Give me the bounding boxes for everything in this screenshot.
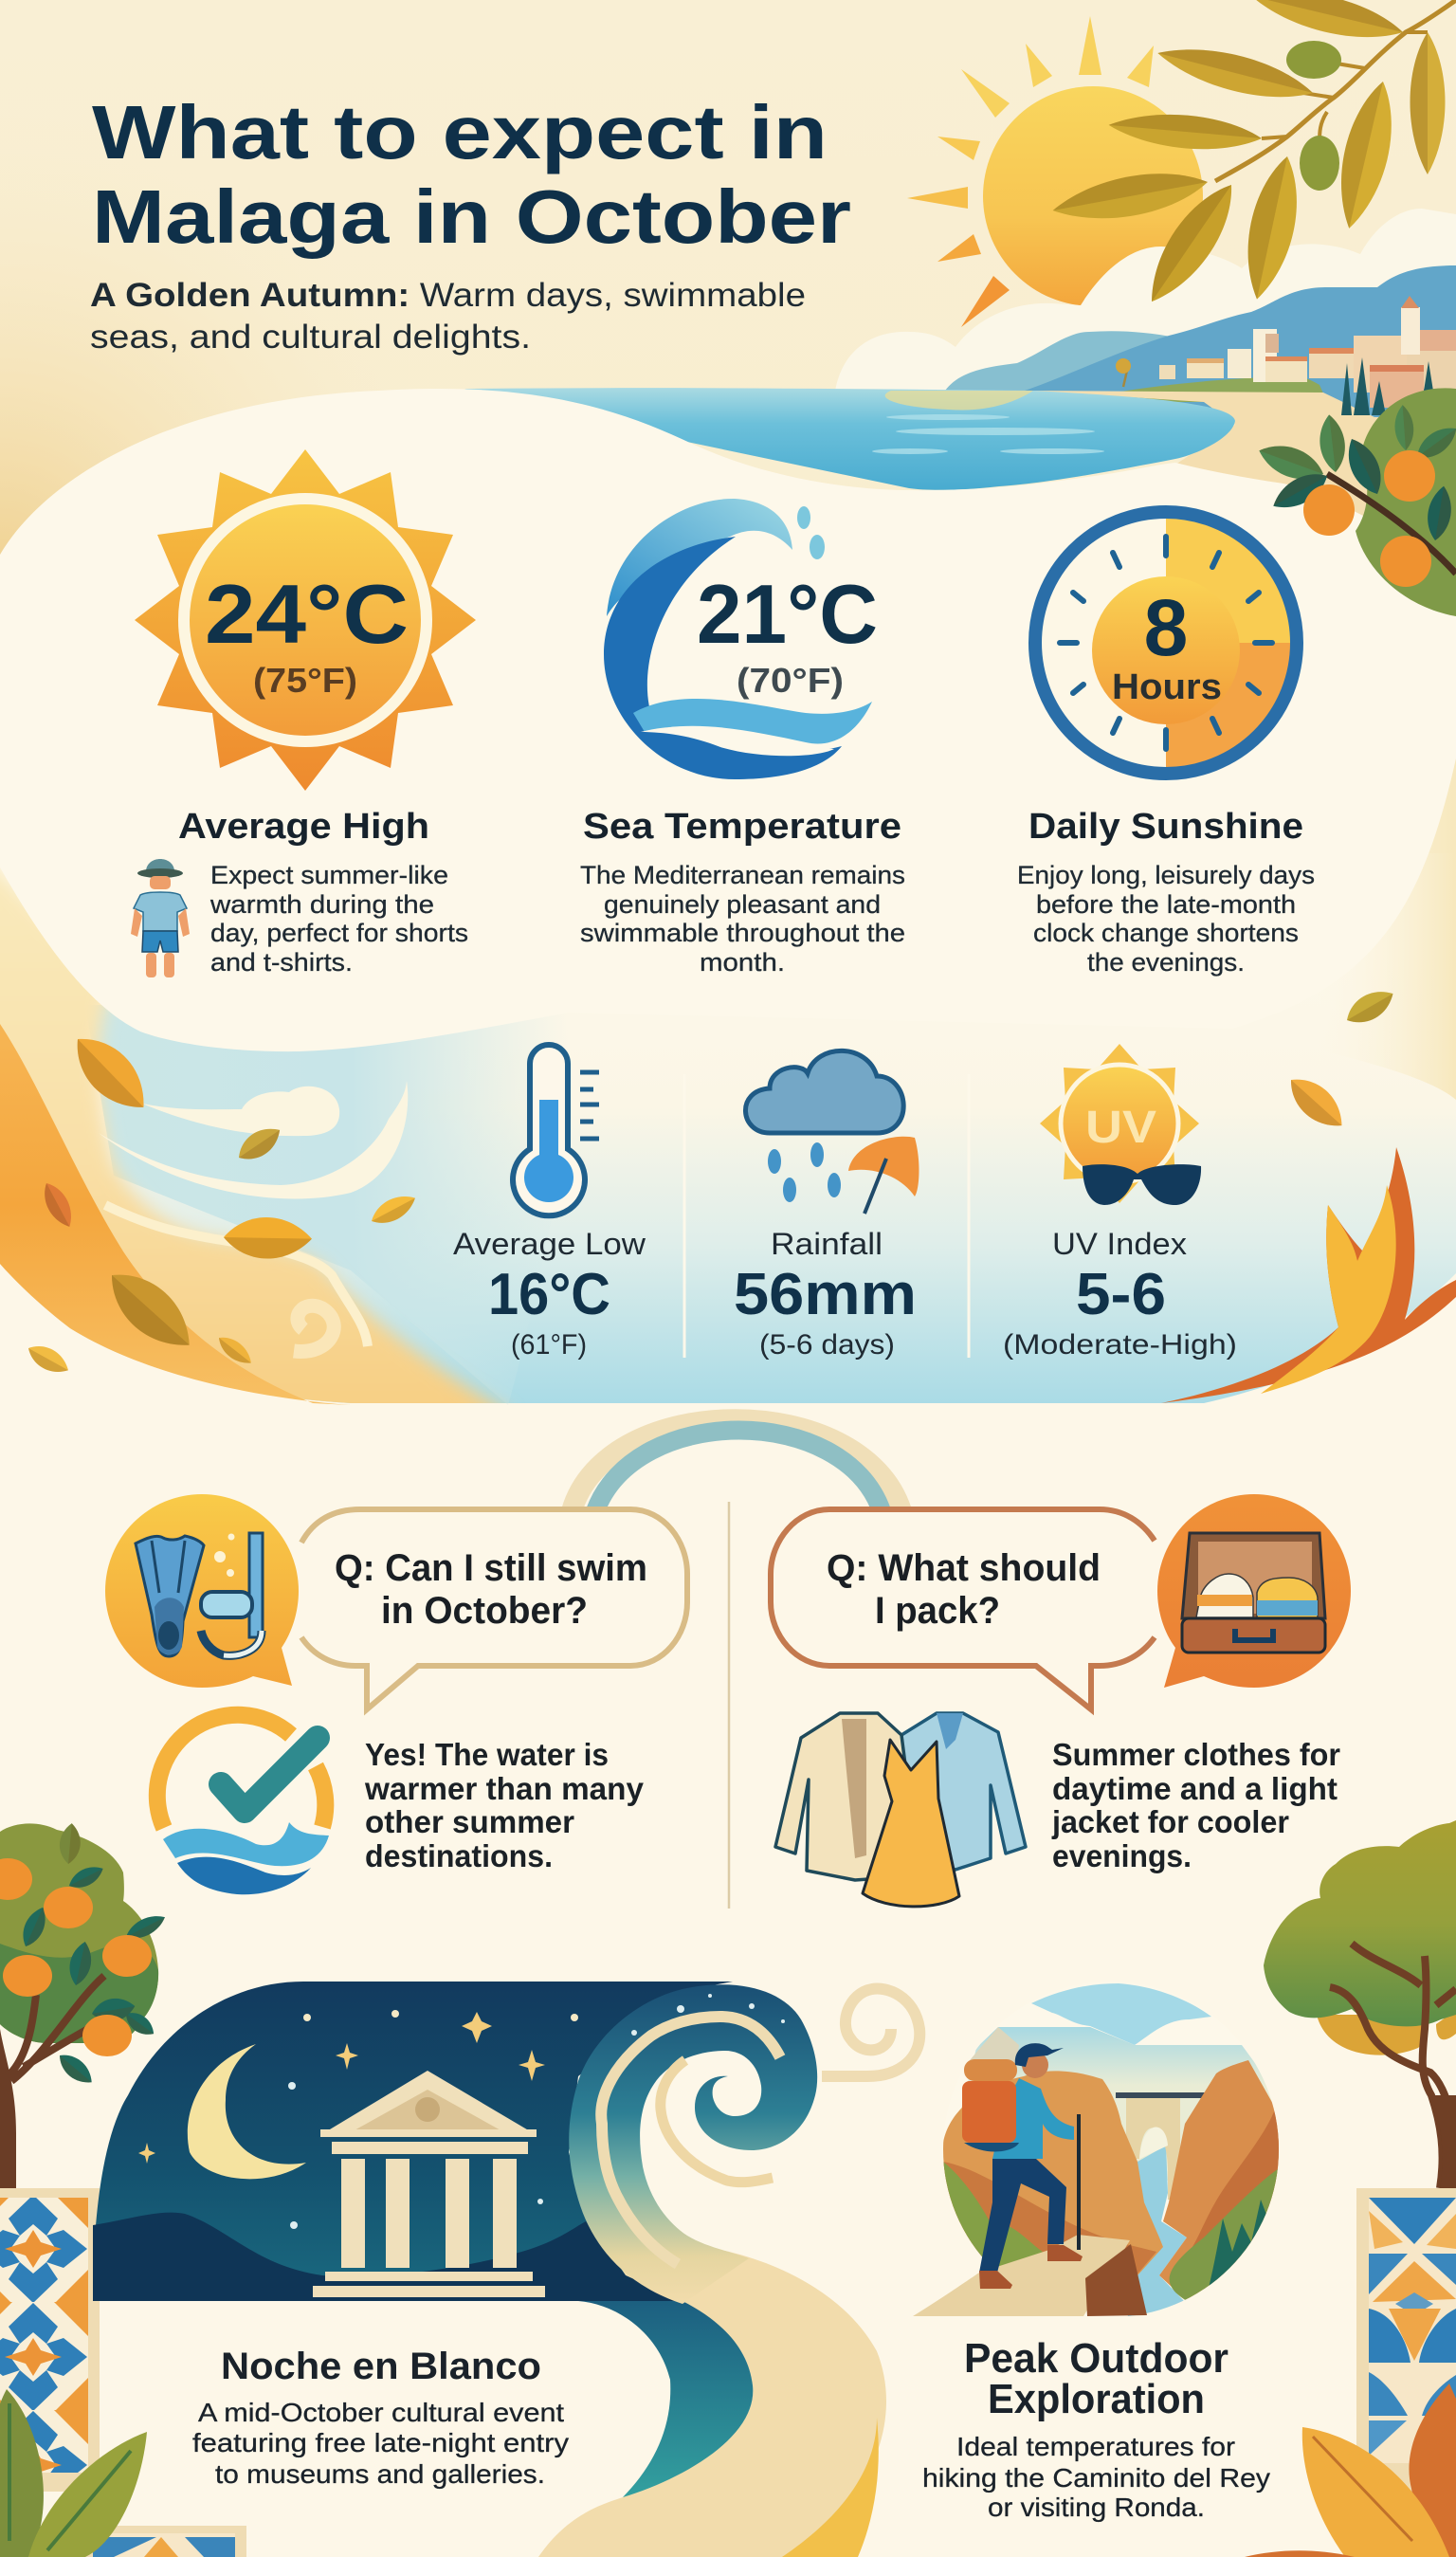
text: swim answer bbox=[364, 1737, 645, 1873]
text: average low value: Average Low bbox=[453, 1227, 646, 1261]
text: packing answer: daytime and a light bbox=[1052, 1771, 1338, 1806]
decoration: falling leaves bbox=[24, 983, 1399, 1379]
spiral highlight bbox=[601, 2017, 780, 2264]
panel: noche en blanco night scene bbox=[93, 1982, 817, 2497]
panel: swim question bbox=[105, 1494, 687, 1894]
icon: fins and snorkel bbox=[105, 1494, 299, 1688]
heading: daily sunshine: Daily Sunshine bbox=[1028, 807, 1303, 847]
heading: average high: Average High bbox=[178, 807, 429, 847]
icon: sun with temperature: (75°F) bbox=[253, 661, 357, 700]
text: daily sunshine description: before the late-month bbox=[1036, 890, 1296, 919]
spiral wave bbox=[569, 1984, 817, 2304]
text: sea temperature description bbox=[580, 861, 905, 977]
callout: packing question bubble bbox=[771, 1509, 1155, 1709]
spiral inner swirl bbox=[661, 2060, 773, 2183]
illustration: orange tree branch bbox=[1254, 388, 1456, 616]
lower teal wave bbox=[578, 2301, 753, 2497]
text: sea temperature description: genuinely pleasant and bbox=[604, 890, 881, 919]
decoration: beige swirl bbox=[822, 1988, 919, 2076]
hiking scene circle bbox=[943, 1982, 1279, 2317]
text: average high description: Expect summer-like bbox=[210, 861, 448, 889]
illustration: olive branch bbox=[1049, 0, 1456, 313]
illustration: autumn flame leaves bbox=[1161, 1147, 1456, 1403]
text: peak outdoor exploration: hiking the Caminito del Rey bbox=[922, 2463, 1270, 2493]
illustration: left azulejo tiles bbox=[0, 2188, 100, 2520]
subtitle: seas, and cultural delights. bbox=[90, 319, 531, 356]
text: sea temperature description: month. bbox=[700, 948, 785, 977]
text: packing answer: jacket for cooler bbox=[1051, 1804, 1289, 1839]
icon: rain cloud with umbrella bbox=[745, 1050, 919, 1214]
text: rainfall value bbox=[734, 1227, 917, 1361]
text: packing answer: Summer clothes for bbox=[1052, 1737, 1340, 1772]
text: average low value: (61°F) bbox=[511, 1329, 587, 1361]
illustration: coastal town bbox=[1115, 296, 1456, 408]
illustration: bottom right autumn leaves bbox=[1245, 2383, 1456, 2557]
callout: packing question bubble: I pack? bbox=[875, 1590, 1000, 1632]
icon: sun with sunglasses: UV bbox=[1085, 1103, 1156, 1153]
illustration: bottom tile bbox=[79, 2526, 246, 2557]
stat: average low bbox=[453, 1045, 646, 1361]
callout: swim question bubble: in October? bbox=[381, 1590, 588, 1632]
heading: sea temperature: Sea Temperature bbox=[583, 807, 901, 847]
callout: swim question bubble bbox=[301, 1509, 687, 1709]
illustration: bottom left leaves bbox=[0, 2389, 147, 2557]
icon: clock with eight hours: 8 bbox=[1144, 583, 1188, 672]
icon: clock with eight hours bbox=[1035, 512, 1297, 774]
decoration: arch bbox=[572, 1419, 901, 1511]
text: peak outdoor exploration: Peak Outdoor bbox=[964, 2335, 1228, 2382]
illustration: beach bbox=[1028, 391, 1456, 607]
text: uv index value: UV Index bbox=[1052, 1227, 1187, 1261]
stat: rainfall bbox=[734, 1050, 919, 1361]
icon: person in summer clothes bbox=[131, 859, 190, 977]
text: noche en blanco: to museums and galleries. bbox=[215, 2459, 545, 2489]
title: Malaga in October bbox=[92, 174, 851, 259]
illustration: sea bbox=[464, 388, 1235, 490]
text: average high description: day, perfect for shorts bbox=[210, 919, 468, 947]
text: uv index value bbox=[1003, 1227, 1237, 1361]
subtitle: A Golden Autumn: Warm days, swimmable bbox=[90, 277, 806, 314]
illustration: bottom gold swoosh bbox=[782, 2418, 879, 2557]
icon: wave with temperature: (70°F) bbox=[737, 661, 844, 700]
text: peak outdoor exploration: Exploration bbox=[988, 2376, 1205, 2422]
illustration: cypress trees bbox=[1341, 357, 1435, 415]
panel: white content blob bbox=[0, 389, 1456, 1051]
text: rainfall value: 56mm bbox=[734, 1262, 917, 1327]
text: swim answer: destinations. bbox=[365, 1838, 553, 1873]
icon: check mark with waves bbox=[157, 1715, 329, 1894]
text: noche en blanco: A mid-October cultural event bbox=[198, 2398, 564, 2427]
callout: packing question bubble: Q: What should bbox=[827, 1547, 1101, 1589]
stat: sea temperature bbox=[580, 499, 905, 977]
text: rainfall value: (5-6 days) bbox=[759, 1329, 895, 1361]
icon: clock with eight hours: Hours bbox=[1112, 667, 1222, 707]
icon: sun with temperature: 24°C bbox=[205, 567, 409, 661]
text: uv index value: (Moderate-High) bbox=[1003, 1329, 1237, 1361]
illustration: left orange tree bbox=[0, 1822, 169, 2188]
panel: outdoor exploration scene bbox=[913, 1982, 1279, 2317]
icon: wave with temperature: 21°C bbox=[697, 567, 878, 661]
text: average low value bbox=[453, 1227, 646, 1361]
night sky bbox=[93, 1982, 733, 2301]
title bbox=[92, 90, 851, 259]
stat: daily sunshine bbox=[1017, 512, 1315, 977]
text: swim answer: Yes! The water is bbox=[365, 1737, 609, 1772]
text: rainfall value: Rainfall bbox=[771, 1227, 883, 1261]
text: swim answer: other summer bbox=[365, 1804, 574, 1839]
icon: open suitcase bbox=[1157, 1494, 1351, 1688]
icon: temple bbox=[313, 2071, 545, 2297]
icon: thermometer bbox=[513, 1045, 599, 1215]
rock ledge bbox=[913, 2235, 1130, 2316]
header background bbox=[0, 0, 1456, 948]
text: noche en blanco: featuring free late-night entry bbox=[192, 2428, 569, 2457]
text: sea temperature description: swimmable throughout the bbox=[580, 919, 905, 947]
text: peak outdoor exploration bbox=[922, 2335, 1270, 2522]
text: average high description: and t-shirts. bbox=[210, 948, 353, 977]
icon: hiker bbox=[962, 2043, 1083, 2289]
illustration: header sun bbox=[907, 16, 1203, 327]
stat: uv index bbox=[1003, 1044, 1237, 1361]
stat: average high bbox=[131, 449, 476, 977]
text: average low value: 16°C bbox=[488, 1262, 610, 1327]
text: peak outdoor exploration: or visiting Ronda. bbox=[988, 2493, 1205, 2522]
title: What to expect in bbox=[92, 90, 828, 174]
icon: jacket, dress and shirt bbox=[775, 1713, 1026, 1907]
illustration: right azulejo tiles bbox=[1356, 2188, 1456, 2511]
moon bbox=[188, 2044, 306, 2179]
decoration: cream wind streaks bbox=[99, 1081, 408, 1351]
text: packing answer bbox=[1051, 1737, 1340, 1873]
text: peak outdoor exploration: Ideal temperatures for bbox=[956, 2432, 1235, 2461]
text: daily sunshine description: Enjoy long, leisurely days bbox=[1017, 861, 1315, 889]
panel: lower stats band bbox=[0, 740, 1456, 1441]
icon: sun with temperature bbox=[135, 449, 476, 791]
text: uv index value: 5-6 bbox=[1076, 1262, 1166, 1327]
icon: sun with sunglasses bbox=[1040, 1044, 1201, 1205]
text: sea temperature description: The Mediterranean remains bbox=[580, 861, 905, 889]
illustration: sand river bbox=[538, 2247, 886, 2557]
illustration: header clouds bbox=[834, 209, 1456, 408]
illustration: hills bbox=[945, 265, 1456, 417]
text: packing answer: evenings. bbox=[1052, 1838, 1192, 1873]
stars bbox=[138, 1994, 785, 2229]
panel: packing question bbox=[771, 1494, 1351, 1907]
illustration: right olive tree bbox=[1264, 1820, 1456, 2188]
text: noche en blanco: Noche en Blanco bbox=[221, 2346, 541, 2387]
text: daily sunshine description bbox=[1017, 861, 1315, 977]
text: average high description: warmth during the bbox=[209, 890, 434, 919]
text: average high description bbox=[209, 861, 468, 977]
night hills bbox=[93, 2213, 682, 2301]
text: daily sunshine description: clock change shortens bbox=[1033, 919, 1299, 947]
text: swim answer: warmer than many bbox=[364, 1771, 645, 1806]
icon: wave with temperature bbox=[604, 499, 878, 779]
text: daily sunshine description: the evenings. bbox=[1087, 948, 1245, 977]
subtitle bbox=[90, 277, 806, 356]
callout: swim question bubble: Q: Can I still swim bbox=[335, 1547, 647, 1589]
text: noche en blanco bbox=[192, 2346, 569, 2489]
